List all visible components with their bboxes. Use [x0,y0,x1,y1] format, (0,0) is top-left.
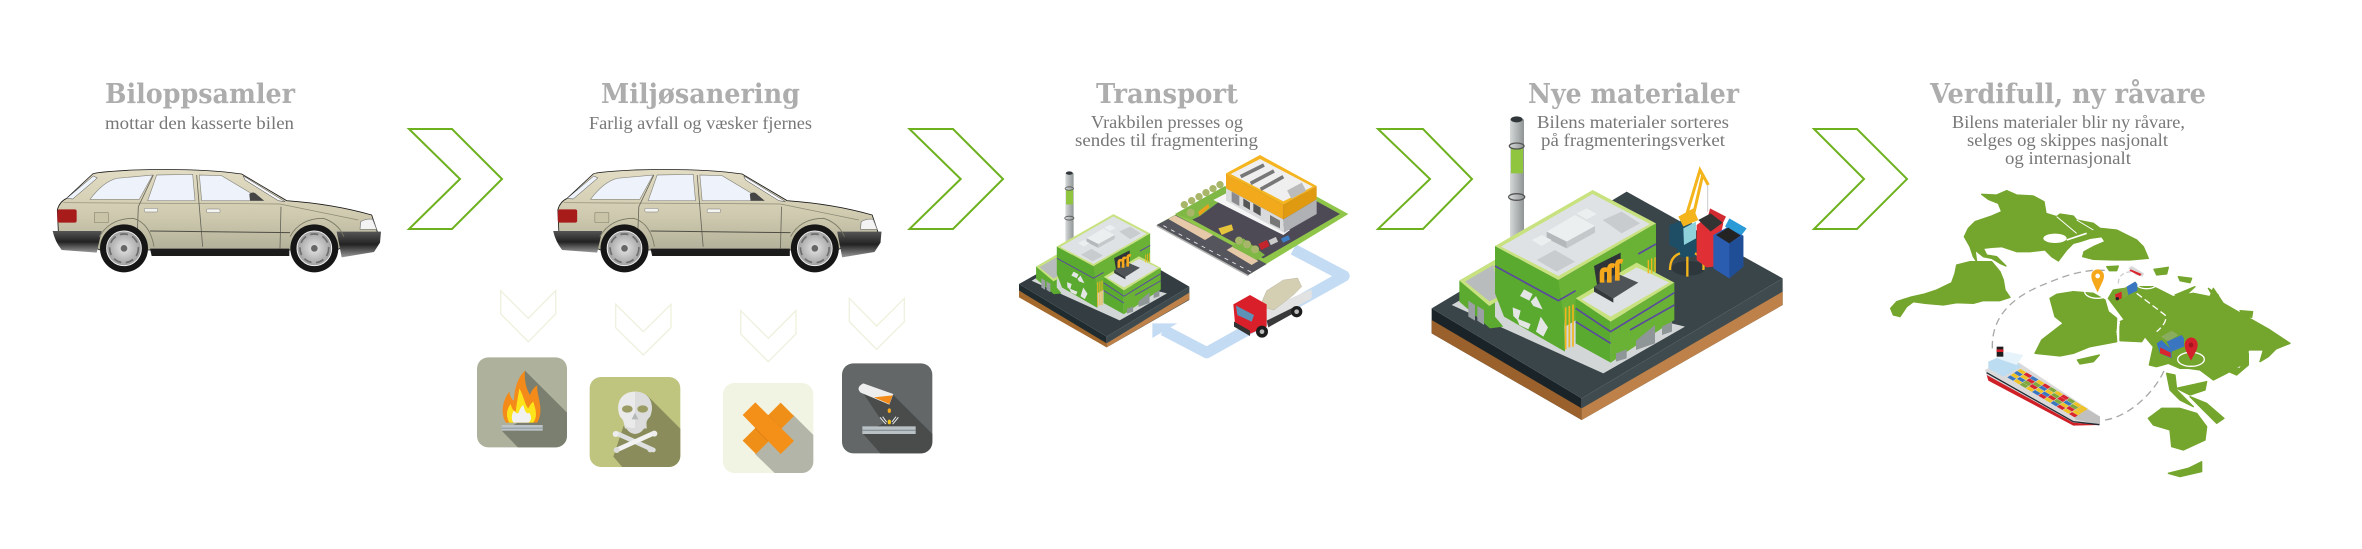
recycling plant [1019,171,1189,347]
chevron: down 4 [849,298,904,349]
text: Bilens materialer blir ny råvare, selges og skippes nasjonalt og internasjonalt [1952,112,2185,168]
icon: car [53,169,381,272]
text: Vrakbilen presses og sendes til fragmentering: Vrakbilen presses og [1091,112,1243,132]
heading: Verdifull, ny råvare: Verdifull, ny råvare [1929,77,2206,110]
chevron: down 2 [616,304,671,355]
heading: Nye materialer: Nye materialer [1528,79,1740,110]
world map [1891,191,2290,477]
recycling plant [1452,116,1685,373]
arrow: step 2 to 3 [910,129,1003,229]
text: Bilens materialer sorteres på fragmenteringsverket [1537,112,1729,150]
icon: corrosive liquid [842,363,932,454]
arrow: blue route [1152,249,1344,353]
car dealership lot [1157,155,1348,277]
panel: Biloppsamler [53,79,381,272]
panel: Nye materialer [1432,79,1783,420]
text: mottar den kasserte bilen: mottar den kasserte bilen [105,113,294,133]
text: Bilens materialer blir ny råvare, selges og skippes nasjonalt og internasjonalt: Bilens materialer blir ny råvare, [1952,112,2185,132]
plant base [1432,192,1783,420]
chevron: down 3 [741,311,796,362]
container ship [1985,347,2100,426]
panel: Miljøsanering [477,79,943,487]
heading: Miljøsanering: Miljøsanering [601,79,800,110]
icon: red pin [2185,337,2198,361]
text: Bilens materialer blir ny råvare, selges og skippes nasjonalt og internasjonalt: og internasjonalt [2005,148,2131,168]
hazard icons group [477,291,943,487]
heading: Transport: Transport [1096,79,1239,110]
text: Bilens materialer sorteres på fragmenteringsverket: på fragmenteringsverket [1541,130,1725,150]
truck with car [1233,278,1312,338]
bins [1697,208,1747,278]
arrow: step 1 to 2 [409,129,502,229]
icon: car [553,169,881,272]
icon: orange pin [2091,269,2104,292]
arrow: step 3 to 4 [1378,129,1472,229]
icon: skull and crossbones [590,377,680,467]
truck [2115,282,2137,301]
chevron: down 1 [501,291,556,342]
text: Bilens materialer blir ny råvare, selges og skippes nasjonalt og internasjonalt: selges og skippes nasjonalt [1967,130,2168,150]
panel: Verdifull, ny råvare [1891,77,2290,477]
small ship [2128,266,2144,277]
panel: Transport [1019,79,1348,353]
icon: crossed plaster [723,383,814,473]
arrow: step 4 to 5 [1814,129,1907,229]
text: Vrakbilen presses og sendes til fragmentering [1075,112,1258,150]
shipping routes [1992,270,2204,420]
text: Vrakbilen presses og sendes til fragmentering: sendes til fragmentering [1075,130,1258,150]
heading: Biloppsamler: Biloppsamler [105,79,296,110]
crane [1669,170,1708,277]
text: Bilens materialer sorteres på fragmenteringsverket: Bilens materialer sorteres [1537,112,1729,132]
text: Farlig avfall og væsker fjernes: Farlig avfall og væsker fjernes [589,113,812,133]
containers [2157,331,2184,358]
icon: flame [477,357,567,448]
